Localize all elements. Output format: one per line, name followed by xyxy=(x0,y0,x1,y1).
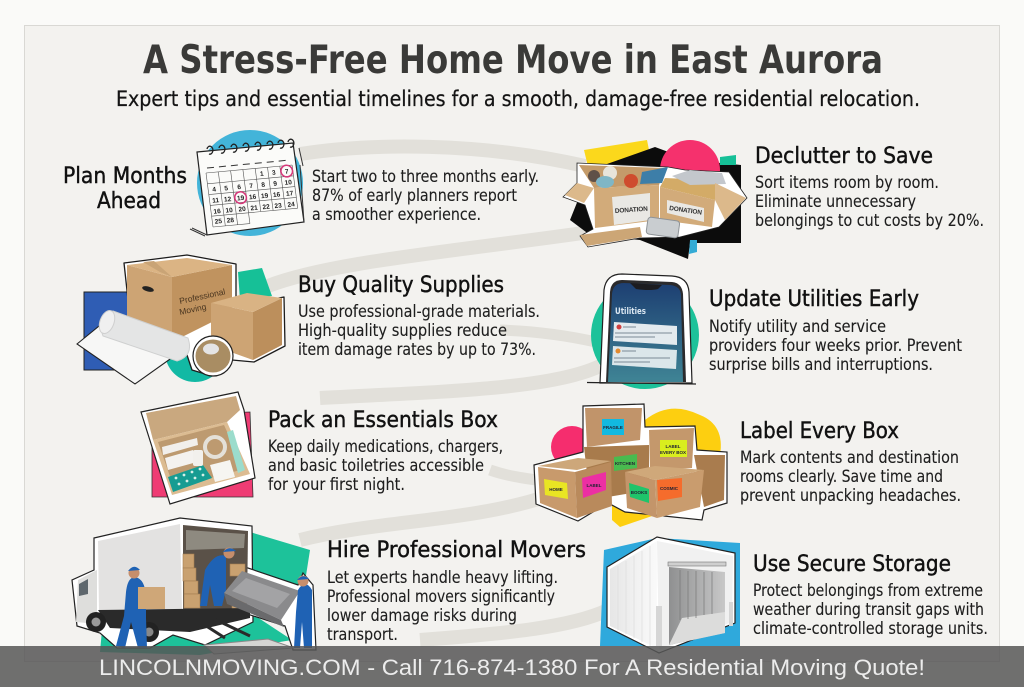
body text: label every box: rooms clearly. Save time and xyxy=(740,467,943,487)
icon: open essentials box xyxy=(141,392,255,504)
icon: calendar: 21 xyxy=(250,205,259,212)
icon: calendar: 10 xyxy=(284,179,293,187)
icon: boxes, bubble wrap and tape: Professional xyxy=(178,286,226,306)
icon: stacked labelled boxes: FRAGILE xyxy=(603,425,623,430)
icon: donation boxes: DONATION xyxy=(615,206,648,215)
icon: stacked labelled boxes: COSMIC xyxy=(660,486,679,491)
body text: plan months ahead: Start two to three months early. xyxy=(312,167,539,187)
body text: declutter to save: belongings to cut costs by 20%. xyxy=(755,211,984,231)
winding path connecting the steps xyxy=(268,147,608,640)
icon: calendar: 28 xyxy=(226,217,235,225)
icon: stacked labelled boxes: HOME xyxy=(549,487,563,492)
heading: use secure storage: Use Secure Storage xyxy=(753,551,951,577)
icon: calendar: 24 xyxy=(287,201,296,209)
body text: hire professional movers: lower damage risks during xyxy=(327,606,517,626)
body text: pack an essentials box: and basic toiletries accessible xyxy=(268,456,484,476)
body text: update utilities early xyxy=(709,317,962,375)
body text: buy quality supplies: item damage rates by up to 73%. xyxy=(298,340,536,360)
icon: smartphone xyxy=(587,274,699,389)
icon: calendar: 6 xyxy=(237,184,242,191)
icon: calendar: 19 xyxy=(261,193,269,200)
panel: update utilities early xyxy=(587,274,962,389)
body text: plan months ahead xyxy=(312,167,539,225)
icon: calendar: 12 xyxy=(224,196,232,204)
icon: calendar: 16 xyxy=(213,208,222,216)
sofa xyxy=(224,571,300,627)
icon: boxes, bubble wrap and tape: Moving xyxy=(178,301,207,317)
body text: hire professional movers: Let experts handle heavy lifting. xyxy=(327,568,558,588)
footer call to action: LINCOLNMOVING.COM - Call 716-874-1380 For A Residential Moving Quote! xyxy=(99,655,925,680)
body text: declutter to save xyxy=(755,173,984,231)
body text: pack an essentials box: for your first night. xyxy=(268,475,405,495)
heading: hire professional movers: Hire Professional Movers xyxy=(327,537,586,563)
body text: label every box xyxy=(740,448,961,506)
phone screen title: Utilities xyxy=(615,307,646,317)
icon: calendar: 5 xyxy=(224,185,229,192)
body text: hire professional movers xyxy=(327,568,558,645)
panel: label every box xyxy=(534,404,961,527)
body text: use secure storage: climate-controlled storage units. xyxy=(753,619,988,639)
icon: calendar: 11 xyxy=(212,197,220,205)
icon: donation boxes xyxy=(563,140,747,259)
icon: stacked labelled boxes xyxy=(534,404,727,527)
footer banner xyxy=(0,646,1024,687)
body text: hire professional movers: Professional movers significantly xyxy=(327,587,555,607)
icon: calendar: 16 xyxy=(273,191,281,199)
icon: donation boxes: DONATION xyxy=(669,205,703,217)
icon: calendar: 7 xyxy=(285,168,289,176)
panel: use secure storage xyxy=(600,537,988,653)
icon: calendar: 16 xyxy=(249,194,257,201)
body text: label every box: Mark contents and destination xyxy=(740,448,959,468)
heading: buy quality supplies: Buy Quality Supplies xyxy=(298,272,504,298)
icon: moving truck and movers xyxy=(72,518,316,655)
heading: plan months ahead: Plan Months xyxy=(63,163,187,189)
subtitle: Expert tips and essential timelines for a smooth, damage-free residential relocation. xyxy=(116,87,920,111)
notification cards xyxy=(612,322,677,369)
icon: calendar: 20 xyxy=(238,206,247,213)
body text: buy quality supplies: High-quality supplies reduce xyxy=(298,321,507,341)
body text: update utilities early: surprise bills and interruptions. xyxy=(709,355,933,375)
icon: calendar: 23 xyxy=(274,202,283,210)
icon: boxes, bubble wrap and tape xyxy=(77,255,285,384)
body text: plan months ahead: 87% of early planners report xyxy=(312,186,517,206)
icon: calendar: 19 xyxy=(237,195,245,202)
title: A Stress-Free Home Move in East Aurora xyxy=(143,38,883,83)
body text: update utilities early: providers four weeks prior. Prevent xyxy=(709,336,962,356)
icon: stacked labelled boxes: LABEL xyxy=(586,483,602,488)
icon: calendar: 25 xyxy=(214,218,223,226)
heading: declutter to save: Declutter to Save xyxy=(755,143,933,169)
body text: use secure storage xyxy=(753,581,988,639)
mover inside truck xyxy=(200,548,236,606)
body text: buy quality supplies xyxy=(298,302,540,360)
icon: calendar: 4 xyxy=(212,186,217,194)
panel: pack an essentials box xyxy=(141,392,503,504)
body text: use secure storage: weather during transit gaps with xyxy=(753,600,984,620)
body text: pack an essentials box xyxy=(268,437,503,495)
icon: calendar: 9 xyxy=(273,181,278,188)
heading: pack an essentials box: Pack an Essentials Box xyxy=(268,407,498,433)
heading: update utilities early: Update Utilities Early xyxy=(709,286,919,312)
body text: pack an essentials box: Keep daily medications, chargers, xyxy=(268,437,503,457)
icon: calendar: 17 xyxy=(286,190,294,198)
body text: buy quality supplies: Use professional-grade materials. xyxy=(298,302,540,322)
icon: stacked labelled boxes: KITCHEN xyxy=(615,461,635,466)
body text: declutter to save: Sort items room by room. xyxy=(755,173,939,193)
panel: buy quality supplies xyxy=(77,255,540,384)
mover carrying sofa xyxy=(294,576,312,648)
panel: plan months ahead xyxy=(63,130,539,236)
body text: declutter to save: Eliminate unnecessary xyxy=(755,192,916,212)
icon: calendar: 22 xyxy=(262,204,271,211)
body text: update utilities early: Notify utility and service xyxy=(709,317,886,337)
body text: plan months ahead: a smoother experience. xyxy=(312,205,481,225)
icon: calendar: 3 xyxy=(272,170,276,177)
icon: calendar: 10 xyxy=(225,207,234,215)
icon: calendar: 1 xyxy=(260,171,264,178)
icon: stacked labelled boxes: EVERY BOX xyxy=(660,450,686,455)
body text: hire professional movers: transport. xyxy=(327,625,398,645)
heading: label every box: Label Every Box xyxy=(740,418,899,444)
icon: stacked labelled boxes: BOOKS xyxy=(631,490,647,495)
mover with carton xyxy=(116,567,165,648)
body text: label every box: prevent unpacking headaches. xyxy=(740,486,961,506)
icon: storage unit xyxy=(600,537,740,653)
icon: calendar xyxy=(190,130,304,236)
panel: hire professional movers xyxy=(72,518,586,655)
icon: calendar: 7 xyxy=(249,183,254,190)
icon: calendar: 8 xyxy=(261,182,266,189)
panel: declutter to save xyxy=(563,140,984,259)
heading line two: Ahead xyxy=(97,188,161,214)
icon: stacked labelled boxes: LABEL xyxy=(666,444,681,449)
